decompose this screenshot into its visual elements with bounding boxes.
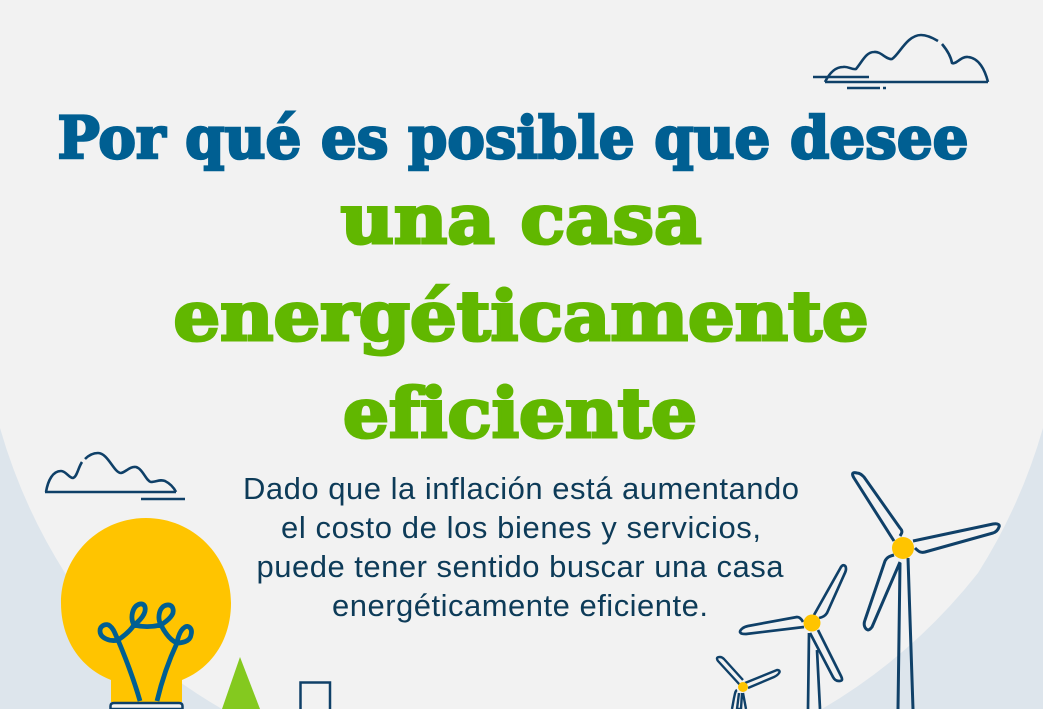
bulb base <box>110 703 182 709</box>
intro text block: el costo de los bienes y servicios, <box>281 510 761 545</box>
icon: left cloud <box>45 453 185 499</box>
icon: small building <box>300 682 330 709</box>
filament <box>100 604 191 701</box>
intro text block <box>243 471 799 623</box>
icon: top right cloud <box>813 35 988 88</box>
title <box>58 104 968 454</box>
turbine hub <box>892 537 914 559</box>
turbine hub <box>804 614 820 632</box>
title line 2: una casa <box>340 180 702 260</box>
icon: large wind turbine <box>853 473 999 709</box>
intro text block: puede tener sentido buscar una casa <box>256 549 784 584</box>
turbine hub <box>738 682 748 692</box>
icon: light bulb <box>61 518 231 709</box>
title line 4: eficiente <box>343 374 697 454</box>
title line 1: Por qué es posible que desee <box>58 104 968 172</box>
title line 3: energéticamente <box>174 277 868 357</box>
icon: green tree <box>222 657 260 709</box>
icon: medium wind turbine <box>740 565 846 709</box>
intro text block: Dado que la inflación está aumentando <box>243 471 799 506</box>
intro text block: energéticamente eficiente. <box>332 588 708 623</box>
bulb glass <box>61 518 231 702</box>
icon: small wind turbine <box>717 657 780 709</box>
